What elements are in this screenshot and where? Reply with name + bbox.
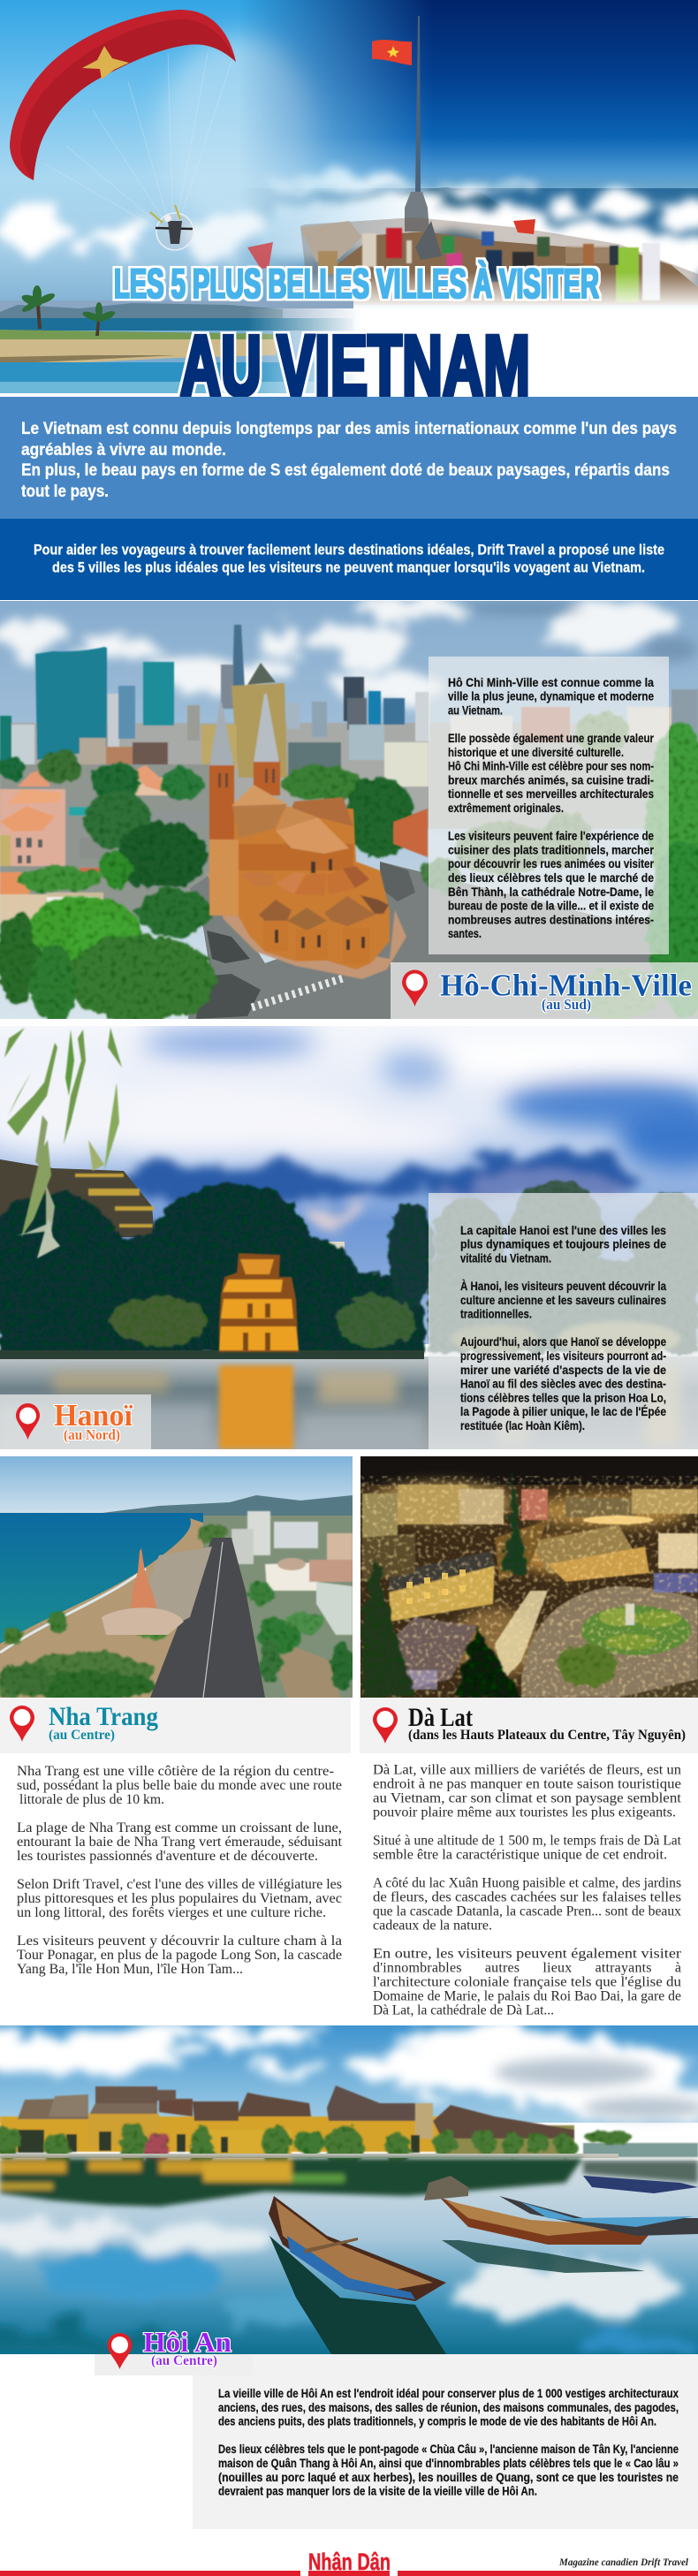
- body text: bureau de poste de la ville... et il existe de: [448, 899, 654, 913]
- body text: sud, possédant la plus belle baie du monde avec une route: [17, 1778, 342, 1793]
- white fade behind main title: [247, 308, 362, 397]
- body text: d'innombrables autres lieux attrayants à: [373, 1960, 681, 1976]
- city label: [391, 962, 698, 1019]
- footer bars: [0, 2571, 698, 2576]
- body text: santes.: [448, 926, 482, 940]
- body text: semble être la caractéristique unique de cet endroit.: [373, 1847, 667, 1863]
- body text: nombreuses autres destinations intéres-: [448, 912, 654, 926]
- mid roofs: [276, 872, 305, 894]
- left-side buildings: [0, 764, 212, 925]
- title line 2: AU VIETNAM: [180, 317, 530, 414]
- panel: Hanoi: [0, 1026, 698, 1449]
- pavement: [206, 870, 406, 979]
- source credit: Magazine canadien Drift Travel: [558, 2556, 689, 2568]
- body text: mirer une variété d'aspects de la vie de: [460, 1363, 666, 1377]
- body text: Tour Ponagar, en plus de la pagode Long Son, la cascade: [17, 1948, 342, 1963]
- panel: Nha Trang: [0, 1456, 355, 1977]
- observation deck: [300, 192, 698, 305]
- body text: Selon Drift Travel, c'est l'une des villes de villégiature les: [17, 1877, 342, 1892]
- apse walls: [263, 930, 307, 951]
- panel: Da Lat: [360, 1456, 698, 2018]
- body text: plus pittoresques et les plus populaires du Vietnam, avec: [17, 1891, 342, 1906]
- city name: Hanoï: [54, 1398, 133, 1432]
- body text: Yang Ba, l'île Hon Mun, l'île Hon Tam...: [17, 1962, 243, 1977]
- upper roofs: [231, 785, 287, 806]
- logo: Nhan Dan: Nhân Dân: [308, 2549, 391, 2575]
- palm trees and far shore: [0, 285, 353, 397]
- body text: un long littoral, des forêts vierges et une culture riche.: [17, 1905, 326, 1920]
- body text: pouvoir plaire même aux touristes les plus exigeants.: [373, 1805, 676, 1820]
- cathedral: [206, 694, 406, 979]
- buildings: [231, 1511, 353, 1635]
- body text: Elle possède également une grande valeur: [448, 731, 654, 745]
- body text: La plage de Nha Trang est comme un croissant de lune,: [17, 1820, 342, 1835]
- body text: littorale de plus de 10 km.: [19, 1792, 164, 1807]
- region: (au Sud): [542, 996, 591, 1013]
- icon: map pin: [10, 1706, 34, 1742]
- city label: [0, 1394, 151, 1449]
- region: (au Centre): [151, 2353, 217, 2368]
- body text: Les visiteurs peuvent faire l'expérience de: [448, 829, 654, 843]
- road: [150, 1538, 265, 1698]
- footer: [0, 2549, 698, 2576]
- body text: extrêmement originales.: [448, 801, 564, 815]
- photo: Da Lat by night: [360, 1456, 698, 1698]
- intro text: agréables à vivre au monde.: [21, 441, 226, 460]
- body text: la Pagode à pilier unique, le lac de l'Épée: [460, 1404, 666, 1418]
- body text: vitalité du Vietnam.: [460, 1250, 551, 1265]
- road: [188, 862, 698, 1019]
- body text: pour découvrir les rues animées ou visiter: [448, 856, 654, 870]
- intro band: [0, 397, 698, 519]
- icon: map pin: [16, 1403, 40, 1440]
- panel: Ho Chi Minh City: [0, 596, 698, 1023]
- lower and mid walls: [233, 806, 391, 970]
- lead text: [34, 541, 664, 576]
- body text: [218, 2386, 679, 2498]
- body text: de fleurs, des cascades cachées sur les falaises telles: [373, 1889, 681, 1905]
- body text: culture ancienne et les saveurs culinaires: [460, 1293, 666, 1307]
- body text: au Vietnam.: [448, 703, 503, 717]
- body text: A côté du lac Xuân Huong paisible et calme, des jardins: [373, 1875, 681, 1891]
- apse roofs: [259, 900, 292, 921]
- photo: Hoi An riverside: [0, 2025, 698, 2358]
- lead band: [0, 519, 698, 600]
- body text: Dà Lat, ville aux milliers de variétés de fleurs, est un: [373, 1762, 681, 1778]
- body text: breux marchés animés, sa cuisine tradi-: [448, 772, 654, 786]
- body text: Domaine de Marie, le palais du Roi Bao Dai, la gare de: [373, 1988, 681, 2004]
- intro text: tout le pays.: [21, 483, 109, 501]
- city name: Nha Trang: [49, 1702, 158, 1731]
- icon: map pin: [108, 2333, 133, 2369]
- turtle tower: [219, 1253, 299, 1352]
- body text: l'architecture coloniale française tels que l'église du: [373, 1974, 681, 1990]
- body text: restituée (lac Hoàn Kiêm).: [460, 1418, 585, 1432]
- body text: En outre, les visiteurs peuvent également visiter: [373, 1946, 682, 1962]
- city name: Hô-Chi-Minh-Ville: [440, 969, 692, 1002]
- text panel background: [429, 657, 669, 954]
- body text: Dà Lat, la cathédrale de Dà Lat...: [373, 2002, 554, 2018]
- panel: Hoi An: [0, 2025, 698, 2529]
- icon: map pin: [373, 1707, 398, 1744]
- body text: traditionnelles.: [460, 1307, 532, 1321]
- body text: entourant la baie de Nha Trang vert émeraude, séduisant: [17, 1835, 343, 1850]
- icon: map pin: [402, 970, 428, 1007]
- header photo: paraglider and flag tower: [0, 0, 698, 397]
- wooden boats: [269, 2176, 698, 2354]
- body text: cuisiner des plats traditionnels, marcher: [448, 842, 654, 856]
- body text: [460, 1223, 666, 1432]
- region: (dans les Hauts Plateaux du Centre, Tây Nguyên): [408, 1728, 686, 1743]
- crosswalk: [252, 978, 343, 1007]
- body text: Hô Chi Minh-Ville est connue comme la: [448, 675, 654, 689]
- body text: cadeaux de la nature.: [373, 1918, 492, 1934]
- willow branches: [4, 1028, 122, 1258]
- tram huong tower: [102, 1548, 184, 1635]
- intro text: [21, 420, 677, 501]
- trees: [0, 712, 698, 1023]
- region: (au Centre): [49, 1728, 115, 1743]
- text panel background: [193, 2354, 698, 2529]
- body text: historique et une diversité culturelle.: [448, 745, 624, 759]
- label band: [0, 1698, 351, 1753]
- label band: [360, 1698, 698, 1753]
- region: (au Nord): [64, 1426, 120, 1443]
- text panel background: [429, 1193, 698, 1449]
- far-right rooftops: [393, 809, 428, 857]
- city name: Hôi An: [143, 2326, 231, 2358]
- reflections: [0, 2158, 698, 2207]
- flagpole and vietnamese flag: [372, 16, 421, 192]
- photo: Turtle Tower at Hoan Kiem lake: [0, 1026, 698, 1449]
- body text: endroit à ne pas manquer en toute saison touristique: [373, 1776, 681, 1792]
- photo: Notre-Dame cathedral and skyline: [0, 596, 698, 1023]
- city lights speckle: [360, 1476, 698, 1698]
- photo: Nha Trang coast: [0, 1456, 355, 1702]
- body text: [17, 1764, 343, 1977]
- right side fade to white: [274, 272, 698, 309]
- body text: au Vietnam, car son climat et son paysage semblent: [373, 1790, 682, 1806]
- water: [0, 2161, 698, 2354]
- body text: Hanoï au fil des siècles avec des destina-: [460, 1377, 666, 1391]
- body text: [448, 675, 654, 940]
- body text: Bên Thành, la cathédrale Notre-Dame, le: [448, 885, 654, 899]
- roundabout: [495, 1586, 698, 1698]
- body text: ville la plus jeune, dynamique et moderne: [448, 689, 654, 703]
- paramotor pilot: [150, 205, 193, 250]
- body text: Situé à une altitude de 1 500 m, le temps frais de Dà Lat: [373, 1833, 682, 1849]
- body text: les touristes passionnés d'aventure et de découverte.: [17, 1849, 318, 1864]
- city label: [95, 2326, 253, 2375]
- body text: Les visiteurs peuvent y découvrir la culture cham à la: [17, 1934, 342, 1949]
- body text: tionnelle et ses merveilles architecturales: [448, 786, 654, 801]
- body text: La capitale Hanoi est l'une des villes les: [460, 1223, 666, 1237]
- body text: des lieux célèbres tels que le marché de: [448, 870, 654, 885]
- body text: devraient pas manquer lors de la visite de la vieille ville de Hôi An.: [218, 2484, 537, 2498]
- body text: Nha Trang est une ville côtière de la région du centre-: [17, 1764, 334, 1779]
- parachute wing: [10, 10, 236, 237]
- houses: [0, 2086, 698, 2157]
- body text: [373, 1762, 682, 2018]
- small kite: [247, 242, 273, 269]
- body text: que la cascade Datanla, la cascade Pren... sont de beaux: [373, 1904, 681, 1919]
- body text: plus dynamiques et toujours pleines de: [460, 1237, 666, 1251]
- city name: Dà Lat: [408, 1703, 473, 1732]
